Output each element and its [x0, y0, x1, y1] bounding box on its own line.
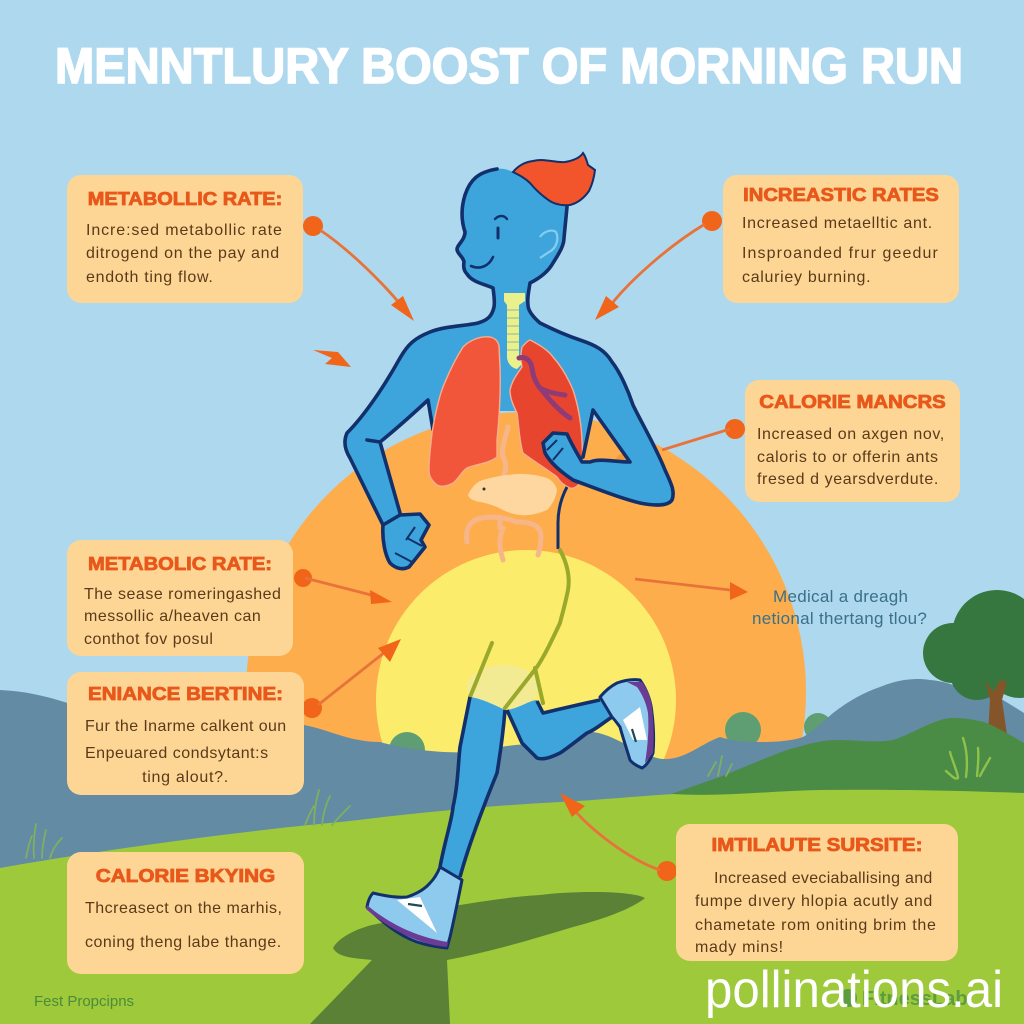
- text block: The sease romeringashed: [84, 586, 281, 603]
- sun inner: [376, 550, 676, 850]
- footer note: Fest Propcipns: [34, 993, 134, 1010]
- arrow 1: [303, 216, 414, 321]
- left hand: [383, 514, 429, 569]
- text block: [757, 426, 945, 488]
- heading: INCREASTIC RATES: [743, 185, 939, 205]
- bushes: [389, 712, 832, 768]
- right green hill: [665, 718, 1024, 830]
- heading: METABOLIC RATE:: [88, 554, 272, 574]
- tree: [923, 590, 1024, 735]
- text block: Thcreasect on the marhis,: [85, 900, 282, 917]
- text block: caloris to or offerin ants: [757, 449, 939, 466]
- text block: [695, 870, 937, 956]
- text block: [84, 586, 281, 648]
- text block: mady mins!: [695, 939, 784, 956]
- dark spine line: [558, 487, 567, 549]
- arrow 3 end dot: [616, 454, 628, 466]
- ear: [540, 231, 557, 258]
- text block: conthot fov posul: [84, 631, 213, 648]
- back leg: [507, 700, 612, 759]
- back shoe: [600, 680, 654, 768]
- text block: ting alout?.: [142, 769, 229, 786]
- text block: coning theng labe thange.: [85, 934, 282, 951]
- text block: Incre:sed metabollic rate: [86, 222, 283, 239]
- watermark: pollinations.ai: [705, 961, 1003, 1019]
- torso, head and arm fill: [345, 169, 673, 525]
- intestines and stomach: [467, 427, 557, 560]
- floating question text: Medical a dreagh: [773, 587, 908, 606]
- text block: fumpe dıvery hlopia acutly and: [695, 893, 933, 910]
- text block: Fur the Inarme calkent oun: [85, 718, 287, 735]
- arrow 2: [595, 211, 722, 320]
- torso outline left: [345, 169, 497, 525]
- bronchi: [519, 358, 570, 418]
- left lung: [429, 337, 500, 486]
- heading: CALORIE BKYING: [96, 866, 275, 886]
- heading: METABOLLIC RATE:: [88, 189, 282, 209]
- heading: IMTILAUTE SURSITE:: [712, 835, 922, 855]
- front leg: [440, 697, 505, 877]
- panel: metabolic rate middle-left: [67, 540, 293, 656]
- loose arrow shape: [313, 350, 351, 367]
- light patch: [467, 665, 539, 709]
- text block: Increased metaelltic ant.: [742, 215, 933, 232]
- arrow 4: [635, 579, 748, 600]
- title: MENNTLURY BOOST OF MORNING RUN: [55, 38, 963, 94]
- text block: [85, 900, 282, 951]
- heading: CALORIE MANCRS: [759, 392, 946, 412]
- arrow 5: [294, 569, 392, 604]
- right lung: [510, 340, 582, 488]
- text block: [86, 222, 283, 286]
- text block: Enpeuared condsytant:s: [85, 745, 269, 762]
- text block: Increased eveciaballising and: [714, 870, 933, 887]
- shorts lines: [470, 550, 569, 708]
- text block: caluriey burning.: [742, 269, 871, 286]
- right forearm and hand: [543, 433, 645, 503]
- arm outline right: [528, 207, 673, 505]
- right hand finger lines: [547, 440, 563, 460]
- text block: ditrogend on the pay and: [86, 245, 280, 262]
- hair: [513, 153, 595, 205]
- panel: calorie mancrs: [745, 380, 960, 502]
- runner figure: [345, 153, 673, 948]
- arrow 7: [560, 793, 677, 881]
- arrow 6: [302, 639, 401, 718]
- floating question text: netional thertang tlou?: [752, 609, 927, 628]
- text block: [742, 215, 939, 286]
- panel: metabolic rate top-left: [67, 175, 303, 303]
- grass tufts: [26, 738, 990, 858]
- ground shadow: [310, 892, 645, 1024]
- front shoe: [366, 867, 462, 948]
- text block: fresed d yearsdverdute.: [757, 471, 939, 488]
- arrow 3: [662, 419, 745, 450]
- panel: eniance bertine: [67, 672, 304, 795]
- trachea: [504, 293, 525, 369]
- sun outer: [246, 412, 806, 972]
- panel: increastic rates top-right: [723, 175, 959, 303]
- heading: ENIANCE BERTINE:: [88, 684, 283, 704]
- text block: chametate rom oniting brim the: [695, 917, 937, 934]
- distant hills: [0, 679, 1024, 900]
- faded footer logo: FitnessLab: [862, 988, 968, 1010]
- text block: messollic a/heaven can: [84, 608, 261, 625]
- text block: Increased on axgen nov,: [757, 426, 945, 443]
- panel: calorie bkying: [67, 852, 304, 974]
- face details: [471, 216, 507, 268]
- text block: [85, 718, 287, 786]
- foreground grass: [0, 790, 1024, 1024]
- arrows: [294, 211, 748, 881]
- text block: endoth ting flow.: [86, 269, 214, 286]
- panel: imtilaute sursite: [676, 824, 958, 961]
- text block: Insproanded frur geedur: [742, 245, 939, 262]
- floating question text: [752, 587, 927, 628]
